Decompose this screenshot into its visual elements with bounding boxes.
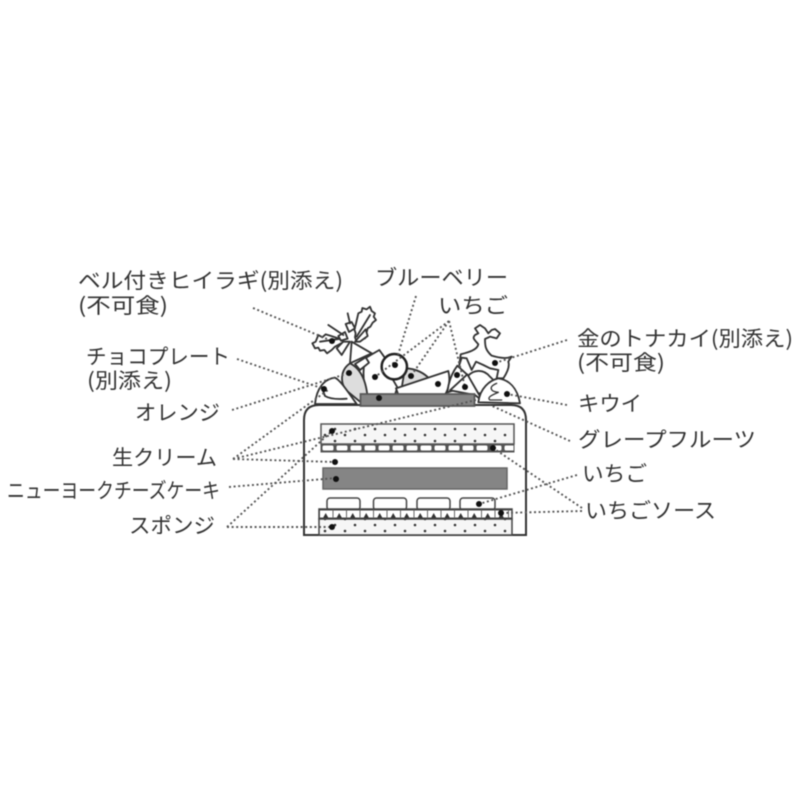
grey fruit behind — [402, 368, 429, 388]
holly, chocolate plate and orange — [312, 307, 376, 404]
upper sauce strip — [321, 444, 514, 452]
upper cream layer — [321, 424, 514, 444]
strawberry wedge lower — [450, 374, 483, 401]
stems and ribbon — [328, 313, 372, 363]
reindeer, strawberries and kiwi — [447, 325, 520, 403]
kiwi — [478, 378, 520, 403]
label: sponge: スポンジ — [129, 510, 215, 540]
bell upper — [346, 322, 355, 332]
mid fruit lobe — [468, 371, 495, 393]
marker dots — [321, 338, 510, 530]
New York cheesecake layer — [323, 468, 507, 489]
label: reindeer inedible note: (不可食) — [577, 347, 665, 377]
label: strawberry top: いちご — [438, 290, 508, 320]
toppings centre — [364, 350, 449, 395]
label: chocolate plate separate note: (別添え) — [87, 365, 172, 395]
orange slice — [315, 378, 357, 404]
sponge layer — [319, 519, 512, 535]
label: holly with bell: ベル付きヒイラギ(別添え) — [78, 265, 343, 295]
label: grapefruit: グレープフルーツ — [578, 424, 756, 454]
bell lower — [338, 332, 348, 341]
reindeer — [459, 325, 512, 378]
label: strawberry sauce: いちごソース — [585, 495, 716, 525]
strawberry row — [327, 498, 495, 510]
dotted leader lines — [227, 296, 582, 527]
holly right leaf — [354, 307, 376, 342]
cake body — [304, 405, 526, 535]
holly left leaf — [312, 334, 343, 353]
chocolate tab — [355, 357, 369, 370]
label: New York cheesecake: ニューヨークチーズケーキ — [7, 475, 220, 505]
strawberry wedge upper — [447, 366, 468, 392]
label: fresh cream: 生クリーム — [112, 442, 217, 472]
kiwi swirl — [489, 383, 502, 400]
label: gold reindeer: 金のトナカイ(別添え) — [577, 323, 793, 353]
label: blueberry: ブルーベリー — [375, 262, 508, 292]
lower sauce strip — [319, 509, 512, 519]
bow loops — [337, 342, 350, 355]
label: holly inedible note: (不可食) — [78, 290, 168, 320]
label: kiwi: キウイ — [578, 388, 642, 418]
large wedge — [364, 350, 397, 395]
label: orange: オレンジ — [135, 397, 220, 427]
chocolate plate base — [360, 394, 474, 406]
holly left leaf vein — [320, 338, 343, 342]
grapefruit — [396, 371, 449, 395]
label: strawberry inner: いちご — [582, 458, 647, 488]
holly right leaf vein — [357, 315, 370, 337]
orange inner line — [322, 387, 347, 399]
blueberry — [382, 354, 407, 379]
chocolate plate — [342, 363, 367, 402]
label: chocolate plate: チョコプレート — [86, 341, 230, 371]
